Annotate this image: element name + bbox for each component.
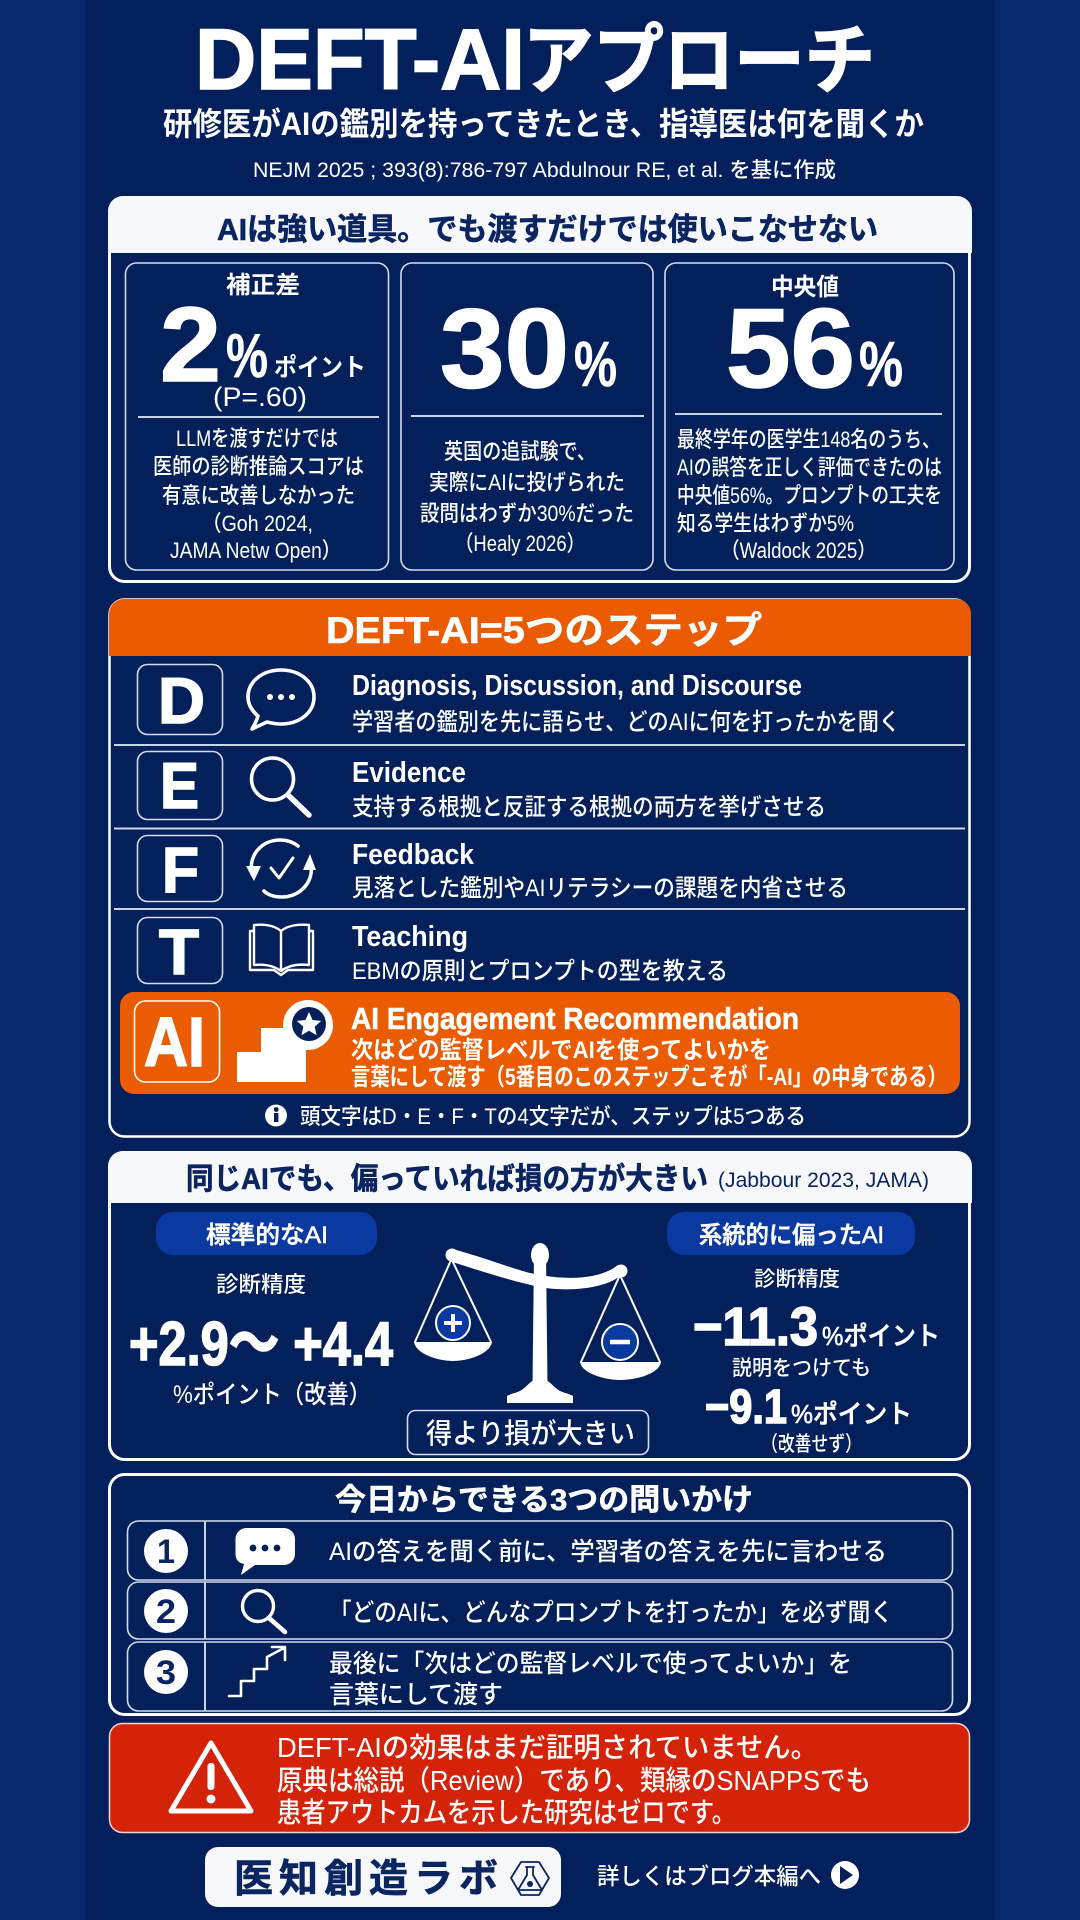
panel heading: (Jabbour 2023, JAMA) (718, 1169, 929, 1192)
step E: Evidence (352, 757, 466, 789)
card: 2 percent point: JAMA Netw Open） (170, 538, 341, 563)
panel heading: DEFT-AI=5つのステップ (326, 610, 762, 651)
card: 2 percent point: 医師の診断推論スコアは (153, 454, 364, 479)
verdict label (408, 1410, 648, 1454)
scale illustration (414, 1243, 661, 1403)
step D: Diagnosis, Discussion, and Discourse (352, 670, 802, 702)
question 2 (128, 1582, 952, 1639)
panel heading background (108, 1151, 972, 1203)
card: 30 percent: % (574, 328, 617, 400)
source citation: NEJM 2025 ; 393(8):786-797 Abdulnour RE, et al. を基に作成 (253, 159, 836, 182)
card: 2 percent point: (P=.60) (213, 382, 307, 412)
step D: D (158, 664, 205, 737)
card: 2 percent point: 補正差 (226, 272, 300, 299)
icon: speech bubble (248, 670, 314, 729)
column: standard AI: %ポイント（改善） (173, 1381, 371, 1409)
panel heading background (109, 599, 971, 656)
step D: 学習者の鑑別を先に語らせ、どのAIに何を打ったかを聞く (352, 709, 900, 736)
icon: warning triangle (171, 1743, 251, 1811)
question 3: 3 (156, 1654, 176, 1692)
card: 56 percent: 中央値 (771, 274, 839, 301)
step D (138, 664, 900, 737)
card: 2 percent point: % (226, 322, 268, 391)
step AI highlighted: AI Engagement Recommendation (351, 1001, 799, 1036)
card: 56 percent: （Waldock 2025） (721, 538, 876, 563)
card: 56 percent: AIの誤答を正しく評価できたのは (677, 455, 942, 480)
panel heading: AIは強い道具。でも渡すだけでは使いこなせない (217, 212, 878, 247)
column: standard AI: +2.9〜 +4.4 (129, 1310, 393, 1379)
step F: F (162, 834, 199, 906)
link to blog: 詳しくはブログ本編へ (597, 1863, 821, 1889)
step E (138, 749, 826, 822)
column: biased AI: 説明をつけても (732, 1357, 871, 1380)
card: 2 percent point: ポイント (274, 354, 366, 382)
title: DEFT-AI (195, 12, 525, 108)
icon: magnifier (242, 1590, 285, 1632)
card: 56 percent: 知る学生はわずか5% (677, 511, 854, 536)
card: 2 percent point: 有意に改善しなかった (162, 483, 355, 508)
question 2: 「どのAIに、どんなプロンプトを打ったか」を必ず聞く (329, 1599, 893, 1627)
note: 頭文字はD・E・F・Tの4文字だが、ステップは5つある (300, 1104, 806, 1129)
step F: Feedback (352, 839, 475, 871)
title (195, 12, 875, 108)
card: 56 percent: 56 (726, 286, 855, 411)
panel heading: 今日からできる3つの問いかけ (335, 1484, 753, 1517)
callout: warning (110, 1724, 970, 1832)
column: biased AI: −11.3 (693, 1297, 818, 1357)
callout: warning: 患者アウトカムを示した研究はゼロです。 (277, 1797, 736, 1828)
card: 56 percent (665, 263, 954, 570)
callout: warning: 原典は総説（Review）であり、類縁のSNAPPSでも (277, 1765, 871, 1796)
column: standard AI (129, 1212, 393, 1409)
column: standard AI: 標準的なAI (206, 1222, 328, 1249)
verdict label: 得より損が大きい (426, 1418, 635, 1449)
step T: T (159, 916, 199, 988)
icon: solid speech bubble (235, 1528, 295, 1575)
step E: E (160, 749, 199, 822)
column: biased AI (667, 1212, 940, 1456)
callout: warning: DEFT-AIの効果はまだ証明されていません。 (277, 1732, 818, 1763)
step T (138, 916, 728, 988)
icon: book (250, 925, 313, 975)
card: 56 percent: 中央値56%。プロンプトの工夫を (677, 483, 942, 508)
card: 2 percent point: 2 (160, 286, 221, 404)
icon: feedback cycle (246, 840, 316, 897)
panel heading background (108, 196, 972, 253)
card: 56 percent: 最終学年の医学生148名のうち、 (677, 427, 940, 452)
column: biased AI: 診断精度 (754, 1268, 840, 1291)
panel: three questions (110, 1474, 970, 1714)
icon: minus (602, 1324, 638, 1360)
subtitle: 研修医がAIの鑑別を持ってきたとき、指導医は何を聞くか (163, 106, 924, 142)
card: 30 percent: 英国の追試験で、 (444, 439, 596, 464)
column: biased AI: %ポイント (791, 1399, 912, 1429)
step F: 見落とした鑑別やAIリテラシーの課題を内省させる (352, 875, 848, 902)
step AI highlighted: AI (144, 1003, 205, 1081)
card: 30 percent: （Healy 2026） (455, 531, 585, 556)
column: standard AI: 診断精度 (216, 1272, 306, 1297)
step T: EBMの原則とプロンプトの型を教える (352, 958, 728, 985)
icon: magnifier (252, 758, 309, 815)
step T: Teaching (352, 921, 468, 953)
title: アプローチ (523, 19, 875, 104)
step F (138, 834, 848, 906)
icon: stairs with star badge (237, 1000, 333, 1082)
question 3: 最後に「次はどの監督レベルで使ってよいか」を (329, 1650, 852, 1678)
card: 2 percent point: LLMを渡すだけでは (176, 426, 338, 451)
card: 2 percent point: （Goh 2024, (202, 511, 313, 536)
icon: flask (511, 1862, 549, 1895)
step AI highlighted: 次はどの監督レベルでAIを使ってよいかを (351, 1037, 771, 1064)
column: biased AI: −9.1 (705, 1381, 787, 1434)
step AI highlighted: 言葉にして渡す（5番目のこのステップこそが「-AI」の中身である） (351, 1063, 947, 1091)
logo (205, 1847, 561, 1907)
card: 30 percent: 30 (440, 286, 569, 411)
card: 2 percent point (126, 263, 388, 570)
column: biased AI: %ポイント (822, 1321, 940, 1351)
card: 30 percent: 設問はわずか30%だった (420, 501, 634, 526)
question 1: 1 (157, 1533, 175, 1571)
step AI highlighted (120, 992, 960, 1094)
panel: AI is a strong tool (108, 196, 972, 582)
question 3 (128, 1642, 952, 1711)
column: biased AI: 系統的に偏ったAI (699, 1222, 884, 1249)
panel: biased AI comparison (108, 1151, 972, 1460)
logo: 医知創造ラボ (234, 1858, 498, 1901)
step E: 支持する根拠と反証する根拠の両方を挙げさせる (352, 794, 826, 821)
question 2: 2 (156, 1593, 176, 1631)
icon: stairs with arrow (229, 1647, 285, 1696)
card: 30 percent (401, 263, 653, 570)
card: 56 percent: % (859, 328, 903, 400)
panel: five steps (109, 599, 971, 1136)
question 1 (128, 1521, 952, 1580)
column: biased AI: （改善せず） (761, 1433, 862, 1456)
question 1: AIの答えを聞く前に、学習者の答えを先に言わせる (329, 1538, 887, 1566)
icon: play button (831, 1861, 859, 1889)
card: 30 percent: 実際にAIに投げられた (429, 470, 625, 495)
icon: plus (436, 1306, 470, 1340)
question 3: 言葉にして渡す (329, 1681, 503, 1709)
panel heading: 同じAIでも、偏っていれば損の方が大きい (186, 1162, 708, 1196)
